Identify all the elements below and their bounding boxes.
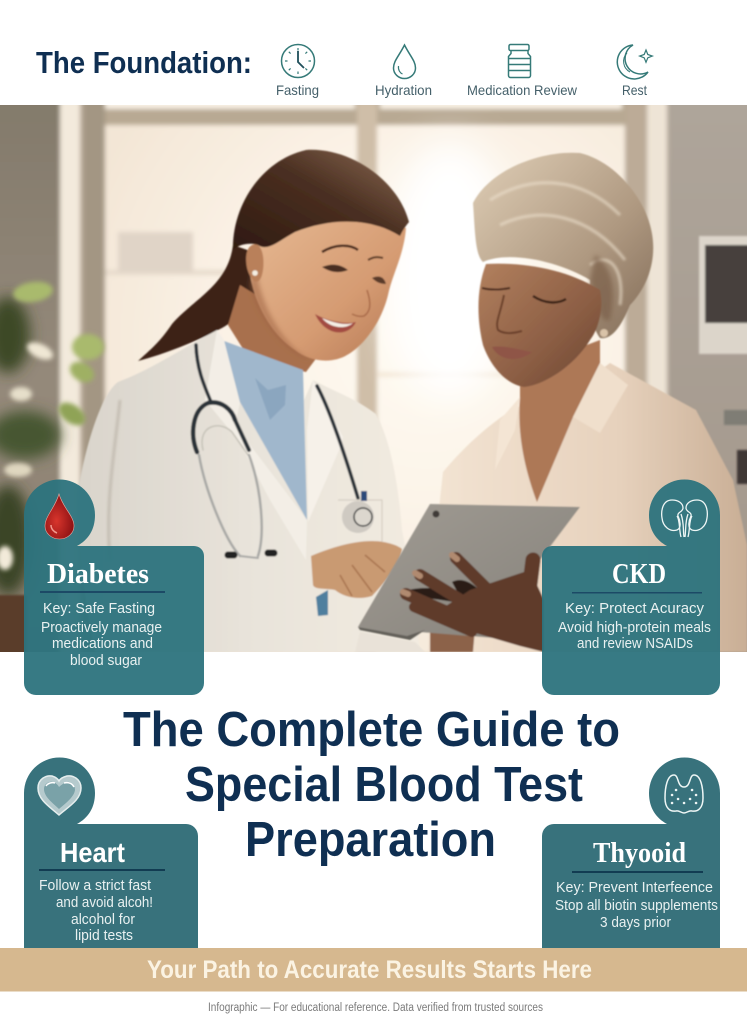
- icon: blood drop: [45, 494, 74, 539]
- icon: water drop, Hydration: [375, 45, 432, 98]
- banner text: Your Path to Accurate Results Starts Here: [147, 956, 592, 984]
- text: Diabetes advice: [41, 600, 162, 669]
- facial features: [482, 288, 510, 290]
- header strip: [0, 0, 747, 105]
- text: Thyroid advice: Key: Prevent Interfeence: [556, 879, 713, 896]
- tablet: [358, 504, 580, 640]
- collar: [573, 363, 628, 433]
- title: Thyooid: Thyooid: [593, 838, 686, 869]
- plant: [0, 279, 104, 655]
- coat lapels: [205, 330, 307, 560]
- text: Heart advice: Follow a strict fast: [39, 877, 152, 894]
- neck and V: [519, 340, 600, 502]
- text: CKD advice: Key: Protect Acuracy: [565, 600, 704, 617]
- face: [250, 219, 406, 361]
- icon: thyroid gland: [665, 775, 703, 813]
- card: Heart: [24, 758, 198, 950]
- banner: [0, 948, 747, 992]
- main title: Special Blood Test: [185, 758, 583, 812]
- text: Diabetes advice: Key: Safe Fasting: [43, 600, 155, 617]
- neck: [227, 284, 316, 373]
- doctor: [77, 150, 420, 652]
- card: Thyroid: [542, 758, 720, 950]
- text: Diabetes advice: blood sugar: [70, 652, 142, 669]
- blouse: [428, 363, 747, 652]
- title: Diabetes: Diabetes: [47, 559, 149, 590]
- heading: The Foundation: The Foundation:: [36, 45, 252, 80]
- doctor ponytail and hair: [138, 245, 262, 361]
- title: Heart: Heart: [60, 837, 125, 868]
- text: CKD advice: and review NSAIDs: [577, 635, 693, 652]
- icon: kidneys: [662, 500, 707, 537]
- photo: doctor and patient reviewing a tablet: [0, 100, 747, 660]
- wall monitor: [699, 236, 747, 484]
- hair: [473, 153, 653, 338]
- lab coat: [77, 330, 420, 652]
- label: Rest: Rest: [622, 82, 647, 98]
- text: Thyroid advice: [555, 879, 718, 931]
- coat pocket: [338, 499, 383, 542]
- text: Diabetes advice: Proactively manage: [41, 619, 162, 636]
- label: Medication Review: Medication Review: [467, 82, 578, 98]
- icon: crescent moon and star, Rest: [617, 45, 652, 98]
- main title: Preparation: [245, 813, 496, 867]
- text: Heart advice: and avoid alcoh!: [56, 894, 153, 911]
- text: Heart advice: lipid tests: [75, 927, 133, 944]
- title: CKD: CKD: [612, 559, 666, 590]
- card: CKD: [542, 480, 720, 695]
- text: Thyroid advice: 3 days prior: [600, 914, 671, 931]
- text: CKD advice: Avoid high-protein meals: [558, 619, 711, 636]
- icon: medication bottle, Medication Review: [467, 44, 578, 98]
- icon: glass heart: [38, 776, 81, 815]
- hair top: [233, 150, 409, 250]
- icon: clock, Fasting: [276, 44, 319, 98]
- doctor's hand: [311, 541, 402, 616]
- main title: The Complete Guide to: [123, 703, 620, 757]
- main title: [123, 703, 620, 867]
- window and room background: [0, 100, 747, 660]
- footer note: Infographic — For educational reference. Data verified from trusted sources: [208, 1002, 543, 1014]
- forearm under tablet: [429, 632, 475, 652]
- text: Heart advice: alcohol for: [71, 911, 135, 928]
- label: Fasting: Fasting: [276, 82, 319, 98]
- patient: [358, 153, 747, 652]
- blue shirt: [224, 341, 307, 520]
- facial features: [322, 246, 358, 252]
- text: CKD advice: [558, 600, 711, 652]
- card: Diabetes: [24, 480, 204, 695]
- bottom coat sleeve overlap: [362, 641, 423, 652]
- text: Thyroid advice: Stop all biotin supplements: [555, 897, 718, 914]
- face: [478, 264, 601, 387]
- text: Diabetes advice: medications and: [52, 635, 153, 652]
- text: Heart advice: [39, 877, 153, 944]
- label: Hydration: Hydration: [375, 82, 432, 98]
- stethoscope: [193, 345, 358, 558]
- patient's hand: [403, 555, 544, 652]
